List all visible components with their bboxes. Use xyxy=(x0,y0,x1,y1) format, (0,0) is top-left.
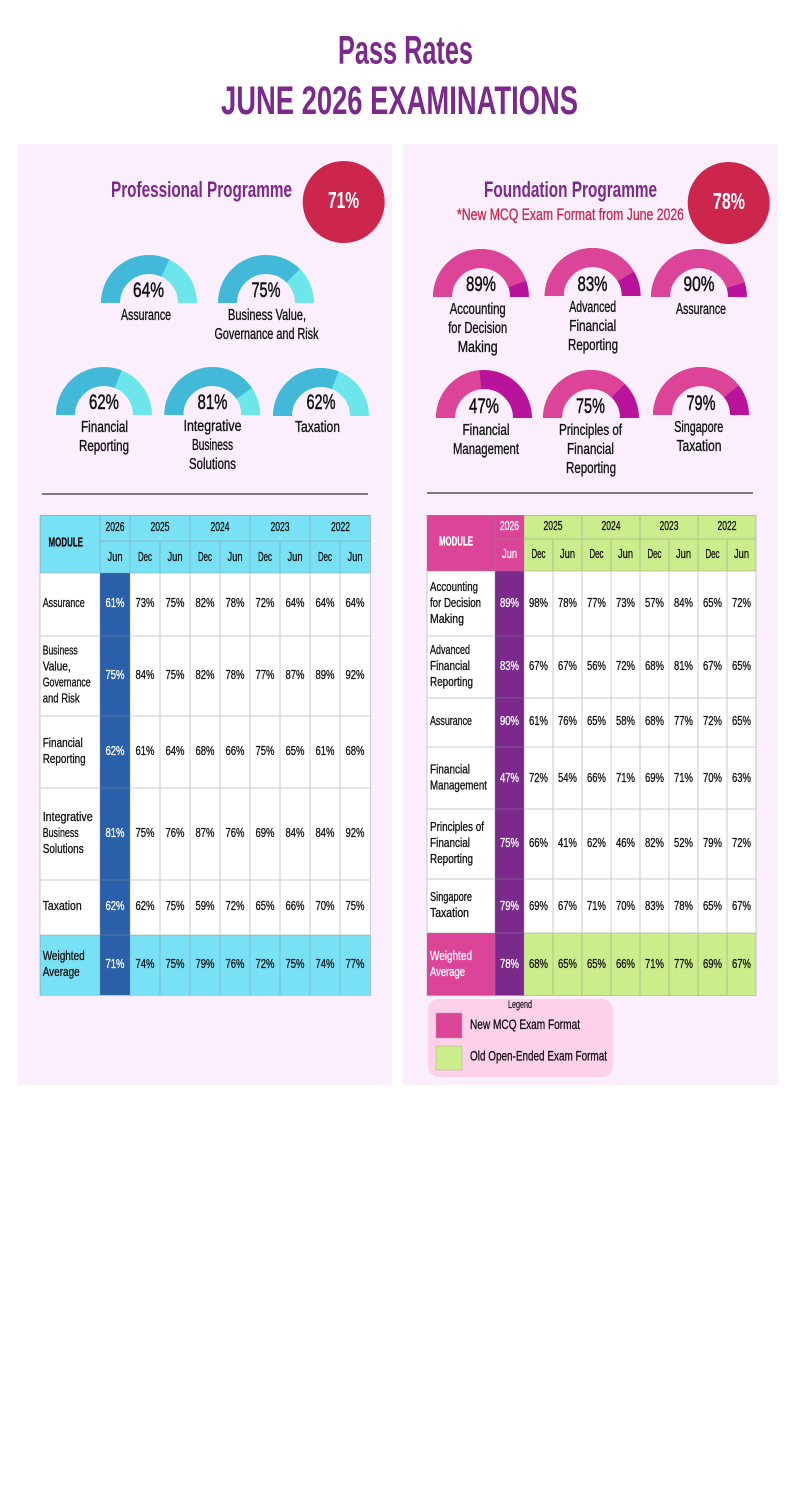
row: weighted average: 75% xyxy=(166,956,185,971)
row: advanced financial reporting: 65% xyxy=(732,658,751,673)
row: business value governance and risk: 92% xyxy=(346,667,365,682)
row: financial management: 71% xyxy=(616,770,635,785)
row: assurance: 82% xyxy=(196,595,215,610)
table header: Jun xyxy=(288,549,302,564)
table header: Dec xyxy=(138,549,152,564)
row: financial reporting: 68% xyxy=(196,743,215,758)
table header: 2025 xyxy=(150,519,170,534)
table: professional programme pass rates xyxy=(40,515,370,996)
gauge: accounting for decision making 89%: for Decision xyxy=(448,320,507,337)
row: assurance: Assurance xyxy=(430,713,472,728)
row: weighted average: 65% xyxy=(587,956,606,971)
row: assurance: 72% xyxy=(703,713,722,728)
row: principles of financial reporting: 66% xyxy=(529,835,548,850)
row: accounting for decision making: Accounting xyxy=(430,579,478,594)
row: accounting for decision making: 84% xyxy=(674,595,693,610)
row: financial reporting: Financial xyxy=(43,735,83,750)
row: singapore taxation: 71% xyxy=(587,898,606,913)
gauge: assurance 64%: 64% xyxy=(133,279,164,302)
row: weighted average: 75% xyxy=(286,956,305,971)
row: assurance: 76% xyxy=(558,713,577,728)
table header: 2026 xyxy=(106,519,124,534)
row: advanced financial reporting: 68% xyxy=(645,658,664,673)
gauge: accounting for decision making 89% xyxy=(442,258,520,356)
gauge: integrative business solutions 81%: Business xyxy=(192,437,233,454)
gauge: assurance 90%: Assurance xyxy=(676,301,726,318)
table header: 2024 xyxy=(210,519,230,534)
gauge: taxation 62%: 62% xyxy=(306,391,336,414)
row: financial reporting: 75% xyxy=(256,743,275,758)
row: integrative business solutions: 84% xyxy=(286,825,305,840)
row: advanced financial reporting: Financial xyxy=(430,658,470,673)
row: business value governance and risk: 87% xyxy=(286,667,305,682)
heading: foundation programme: Foundation Programme xyxy=(484,177,657,202)
row: business value governance and risk: Value, xyxy=(43,658,71,674)
gauge: singapore taxation 79%: Singapore xyxy=(674,419,723,436)
table header: 2025 xyxy=(544,518,562,533)
row: financial management xyxy=(430,762,751,792)
gauge: integrative business solutions 81%: 81% xyxy=(198,391,228,414)
row: accounting for decision making: 65% xyxy=(703,595,722,610)
table header: Jun xyxy=(108,549,122,564)
badge: professional overall rate xyxy=(303,161,385,243)
badge: foundation overall rate: 78% xyxy=(713,188,745,214)
row: weighted average: 71% xyxy=(645,956,664,971)
row: integrative business solutions: Business xyxy=(43,825,79,840)
row: assurance: Assurance xyxy=(43,595,85,610)
row: taxation: 59% xyxy=(196,898,215,913)
legend item: new mcq format: New MCQ Exam Format xyxy=(470,1016,580,1032)
row: financial reporting: 65% xyxy=(286,743,305,758)
table header: Dec xyxy=(258,549,272,564)
title: Pass Rates xyxy=(338,28,473,72)
table header: Dec xyxy=(648,546,662,561)
gauge: business value 75% xyxy=(214,264,319,343)
row: accounting for decision making: 89% xyxy=(500,595,519,610)
legend item: old open-ended format xyxy=(436,1046,607,1070)
row: accounting for decision making: for Decision xyxy=(430,595,481,610)
row: weighted average: Average xyxy=(43,964,80,979)
row: advanced financial reporting: 67% xyxy=(529,658,548,673)
row: taxation: 75% xyxy=(346,898,365,913)
row: accounting for decision making: 98% xyxy=(529,595,548,610)
badge: professional overall rate: 71% xyxy=(328,187,359,213)
row: accounting for decision making: 72% xyxy=(732,595,751,610)
table header: Dec xyxy=(590,546,604,561)
row: singapore taxation: 78% xyxy=(674,898,693,913)
gauge: business value 75%: 75% xyxy=(252,279,280,302)
row: financial management: Management xyxy=(430,778,487,792)
row: singapore taxation: Singapore xyxy=(430,889,472,904)
row: accounting for decision making: Making xyxy=(430,611,464,626)
gauge: advanced financial reporting 83%: Advanced xyxy=(569,299,616,316)
row: advanced financial reporting: 67% xyxy=(558,658,577,673)
gauge: singapore taxation 79% xyxy=(662,376,740,455)
row: business value governance and risk: 82% xyxy=(196,667,215,682)
row: accounting for decision making: 77% xyxy=(587,595,606,610)
row: assurance: 64% xyxy=(346,595,365,610)
row: business value governance and risk: 75% xyxy=(166,667,185,682)
row: financial reporting: 66% xyxy=(226,743,245,758)
row: business value governance and risk: and Risk xyxy=(43,690,80,706)
row: integrative business solutions: Integrative xyxy=(43,809,93,824)
row: financial management: 70% xyxy=(703,770,722,785)
legend: Legend xyxy=(508,999,532,1011)
row: taxation: 62% xyxy=(136,898,155,913)
row: singapore taxation: 69% xyxy=(529,898,548,913)
row: weighted average: 77% xyxy=(346,956,365,971)
table header: Jun xyxy=(676,546,691,561)
table header xyxy=(439,518,749,561)
gauge: advanced financial reporting 83%: Financial xyxy=(569,318,616,335)
row: financial reporting: 68% xyxy=(346,743,365,758)
row: taxation: 75% xyxy=(166,898,185,913)
table header: Jun xyxy=(734,546,749,561)
row: financial reporting xyxy=(43,735,365,766)
row: weighted average: 74% xyxy=(136,956,155,971)
badge: foundation overall rate xyxy=(688,162,770,244)
gauge: principles of financial reporting 75% xyxy=(552,379,630,477)
table header: Jun xyxy=(618,546,633,561)
row: accounting for decision making: 57% xyxy=(645,595,664,610)
row: accounting for decision making xyxy=(430,579,751,626)
row: taxation: 66% xyxy=(286,898,305,913)
legend xyxy=(428,999,613,1077)
row: assurance: 75% xyxy=(166,595,185,610)
gauge: assurance 90% xyxy=(660,258,738,318)
row: weighted average: 65% xyxy=(558,956,577,971)
row: principles of financial reporting: 52% xyxy=(674,835,693,850)
row: weighted average: 67% xyxy=(732,956,751,971)
row: assurance: 58% xyxy=(616,713,635,728)
row: assurance: 90% xyxy=(500,713,519,728)
gauge: financial management 47%: 47% xyxy=(469,395,499,418)
table header: 2026 xyxy=(500,518,519,533)
gauge: principles of financial reporting 75%: Reporting xyxy=(566,460,616,477)
row: advanced financial reporting: 81% xyxy=(674,658,693,673)
gauge: business value 75%: Governance and Risk xyxy=(214,326,319,343)
row: singapore taxation: 83% xyxy=(645,898,664,913)
table header: Dec xyxy=(706,546,720,561)
table header: Jun xyxy=(168,549,182,564)
gauge: singapore taxation 79%: 79% xyxy=(686,392,716,415)
row: principles of financial reporting: 46% xyxy=(616,835,635,850)
row: taxation xyxy=(43,898,365,913)
row: singapore taxation: 67% xyxy=(732,898,751,913)
row: advanced financial reporting: 72% xyxy=(616,658,635,673)
row: weighted average: Weighted xyxy=(43,948,85,963)
row: assurance: 64% xyxy=(286,595,305,610)
gauge: accounting for decision making 89%: Making xyxy=(458,339,498,356)
row: principles of financial reporting: 82% xyxy=(645,835,664,850)
row: advanced financial reporting: Reporting xyxy=(430,674,473,689)
row: financial management: Financial xyxy=(430,762,470,776)
row: financial management: 69% xyxy=(645,770,664,785)
row: integrative business solutions: 69% xyxy=(256,825,275,840)
table header: Dec xyxy=(198,549,212,564)
row: business value governance and risk: 84% xyxy=(136,667,155,682)
table header: Dec xyxy=(318,549,332,564)
gauge: accounting for decision making 89%: 89% xyxy=(466,273,496,296)
gauge: financial reporting 62%: Financial xyxy=(81,419,128,436)
row: accounting for decision making: 73% xyxy=(616,595,635,610)
table header: MODULE xyxy=(439,534,473,548)
row: assurance: 77% xyxy=(674,713,693,728)
gauge: financial reporting 62% xyxy=(66,376,142,455)
row: taxation: 65% xyxy=(256,898,275,913)
row: advanced financial reporting: 67% xyxy=(703,658,722,673)
gauge: business value 75%: Business Value, xyxy=(228,307,306,324)
row: advanced financial reporting: 56% xyxy=(587,658,606,673)
row: integrative business solutions: 76% xyxy=(226,825,245,840)
table: foundation programme pass rates xyxy=(427,515,756,996)
row: principles of financial reporting: 41% xyxy=(558,835,577,850)
row: weighted average: 78% xyxy=(500,956,519,971)
row: advanced financial reporting: Advanced xyxy=(430,642,470,657)
row: integrative business solutions: 81% xyxy=(106,825,125,840)
row: advanced financial reporting xyxy=(430,642,751,689)
row: principles of financial reporting: 79% xyxy=(703,835,722,850)
row: principles of financial reporting: Financial xyxy=(430,835,470,850)
row: singapore taxation: Taxation xyxy=(430,905,469,920)
gauge: financial reporting 62%: 62% xyxy=(89,391,119,414)
row: integrative business solutions: 84% xyxy=(316,825,335,840)
title: JUNE 2026 EXAMINATIONS xyxy=(221,79,578,123)
table header: MODULE xyxy=(48,534,83,550)
row: financial management: 54% xyxy=(558,770,577,785)
table header: 2023 xyxy=(270,519,290,534)
row: business value governance and risk: 89% xyxy=(316,667,335,682)
gauge: assurance 64%: Assurance xyxy=(121,307,171,324)
row: assurance: 72% xyxy=(256,595,275,610)
table header: Jun xyxy=(560,546,575,561)
title xyxy=(221,28,578,123)
row: assurance: 61% xyxy=(106,595,125,610)
row: taxation: Taxation xyxy=(43,898,82,913)
row: assurance xyxy=(430,713,751,728)
row: advanced financial reporting: 83% xyxy=(500,658,519,673)
gauge: assurance 90%: 90% xyxy=(684,273,714,296)
table header: Dec xyxy=(532,546,546,561)
gauge: financial management 47%: Financial xyxy=(462,422,510,439)
row: weighted average: 71% xyxy=(106,956,125,971)
row: financial reporting: 61% xyxy=(316,743,335,758)
row: singapore taxation xyxy=(430,889,751,920)
gauge: principles of financial reporting 75%: Financial xyxy=(567,441,614,458)
row: business value governance and risk: Governance xyxy=(43,674,91,690)
row: singapore taxation: 79% xyxy=(500,898,519,913)
gauge: integrative business solutions 81%: Solutions xyxy=(189,456,236,473)
table header: 2022 xyxy=(718,518,736,533)
gauge: advanced financial reporting 83%: 83% xyxy=(578,273,608,296)
row: business value governance and risk: 77% xyxy=(256,667,275,682)
row: assurance: 73% xyxy=(136,595,155,610)
row: financial management: 63% xyxy=(732,770,751,785)
gauge: singapore taxation 79%: Taxation xyxy=(676,438,722,455)
row: assurance: 65% xyxy=(587,713,606,728)
row: business value governance and risk: 78% xyxy=(226,667,245,682)
row: principles of financial reporting: Reporting xyxy=(430,851,473,866)
row: integrative business solutions: 92% xyxy=(346,825,365,840)
row: assurance: 65% xyxy=(732,713,751,728)
gauge: integrative business solutions 81%: Integrative xyxy=(184,418,242,435)
row: taxation: 62% xyxy=(106,898,125,913)
row: principles of financial reporting xyxy=(430,819,751,866)
row: accounting for decision making: 78% xyxy=(558,595,577,610)
row: principles of financial reporting: 72% xyxy=(732,835,751,850)
gauge: integrative business solutions 81% xyxy=(174,376,251,473)
row: assurance: 64% xyxy=(316,595,335,610)
row: singapore taxation: 70% xyxy=(616,898,635,913)
row: taxation: 72% xyxy=(226,898,245,913)
row: singapore taxation: 65% xyxy=(703,898,722,913)
row: integrative business solutions: 76% xyxy=(166,825,185,840)
gauge: financial management 47% xyxy=(446,379,522,458)
gauge: principles of financial reporting 75%: Principles of xyxy=(559,422,623,439)
row: principles of financial reporting: 62% xyxy=(587,835,606,850)
legend item: old open-ended format: Old Open-Ended Exam Format xyxy=(470,1048,607,1064)
row: weighted average: 68% xyxy=(529,956,548,971)
table header: Jun xyxy=(348,549,362,564)
row: financial management: 71% xyxy=(674,770,693,785)
row: financial reporting: Reporting xyxy=(43,751,86,766)
row: financial reporting: 64% xyxy=(166,743,185,758)
row: weighted average: Average xyxy=(430,964,465,979)
row: weighted average: 69% xyxy=(703,956,722,971)
panel: professional programme xyxy=(18,144,392,1085)
row: business value governance and risk xyxy=(43,642,365,706)
gauge: principles of financial reporting 75%: 75% xyxy=(576,395,605,418)
row: weighted average: 77% xyxy=(674,956,693,971)
table header xyxy=(48,519,362,564)
row: principles of financial reporting: 75% xyxy=(500,835,519,850)
row: financial management: 72% xyxy=(529,770,548,785)
row: principles of financial reporting: Principles of xyxy=(430,819,484,834)
gauge: financial reporting 62%: Reporting xyxy=(79,438,129,455)
row: integrative business solutions: 75% xyxy=(136,825,155,840)
gauge: advanced financial reporting 83%: Reporting xyxy=(568,337,618,354)
row: assurance: 68% xyxy=(645,713,664,728)
table header: Jun xyxy=(228,549,242,564)
gauge: accounting for decision making 89%: Accounting xyxy=(450,301,506,318)
subheading: new mcq format note: *New MCQ Exam Format from June 2026 xyxy=(457,206,684,224)
row: integrative business solutions: 87% xyxy=(196,825,215,840)
heading: professional programme: Professional Programme xyxy=(111,177,292,202)
row: assurance xyxy=(43,595,365,610)
gauge: taxation 62%: Taxation xyxy=(295,419,340,436)
row: business value governance and risk: 75% xyxy=(106,667,125,682)
row: taxation: 70% xyxy=(316,898,335,913)
row: business value governance and risk: Business xyxy=(43,642,78,658)
legend item: new mcq format xyxy=(436,1013,580,1038)
gauge: taxation 62% xyxy=(282,378,360,436)
row: financial reporting: 61% xyxy=(136,743,155,758)
table header: Jun xyxy=(502,546,517,561)
row: integrative business solutions xyxy=(43,809,365,856)
gauge: financial management 47%: Management xyxy=(453,441,519,458)
row: weighted average: 72% xyxy=(256,956,275,971)
row: financial management: 66% xyxy=(587,770,606,785)
panel: foundation programme xyxy=(403,144,778,1085)
row: weighted average xyxy=(43,948,365,979)
row: weighted average: Weighted xyxy=(430,948,472,963)
row: weighted average: 79% xyxy=(196,956,215,971)
row: weighted average xyxy=(430,948,751,979)
row: weighted average: 74% xyxy=(316,956,335,971)
row: integrative business solutions: Solutions xyxy=(43,841,84,856)
table header: 2024 xyxy=(602,518,620,533)
row: assurance: 78% xyxy=(226,595,245,610)
table header: 2022 xyxy=(331,519,350,534)
row: financial reporting: 62% xyxy=(106,743,125,758)
row: financial management: 47% xyxy=(500,770,519,785)
gauge: advanced financial reporting 83% xyxy=(554,258,631,354)
row: weighted average: 66% xyxy=(616,956,635,971)
table header: 2023 xyxy=(660,518,678,533)
gauge: assurance 64% xyxy=(110,264,188,324)
row: weighted average: 76% xyxy=(226,956,245,971)
row: singapore taxation: 67% xyxy=(558,898,577,913)
row: assurance: 61% xyxy=(529,713,548,728)
